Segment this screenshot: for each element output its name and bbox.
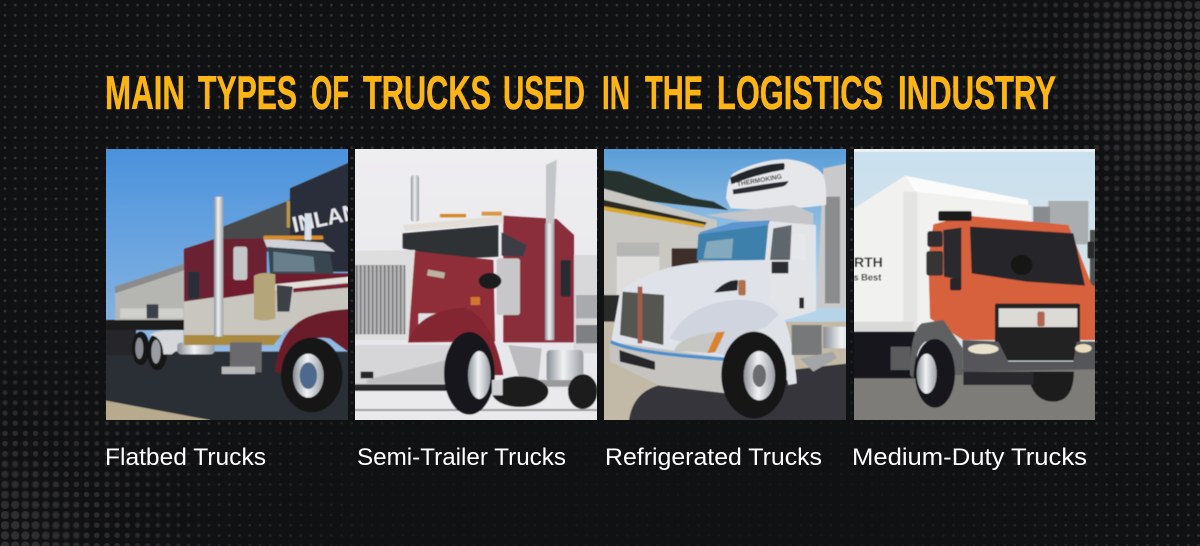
label: medium-duty trucks: Medium-Duty Trucks [852, 444, 1087, 471]
cab [926, 211, 1110, 340]
title: USED [503, 66, 585, 119]
front wheel [721, 332, 787, 418]
photo: flatbed truck [106, 149, 348, 420]
title: INDUSTRY [898, 66, 1056, 119]
photo: semi-trailer truck [355, 149, 597, 420]
hood [408, 251, 495, 342]
fender [408, 308, 503, 375]
wheels [915, 339, 1074, 408]
trees [593, 169, 728, 210]
title: OF [311, 66, 349, 119]
trailer [573, 255, 610, 353]
title: TRUCKS [363, 66, 491, 119]
sleeper [503, 216, 574, 342]
front wheel [444, 332, 503, 415]
air cleaner [479, 258, 520, 315]
bumper [347, 345, 459, 384]
box body [843, 176, 1032, 332]
box body: s Best [853, 272, 881, 282]
cargo box [816, 163, 846, 309]
hood [610, 260, 797, 382]
title: LOGISTICS [717, 66, 883, 119]
label: semi-trailer trucks: Semi-Trailer Trucks [357, 444, 566, 471]
label: flatbed trucks: Flatbed Trucks [105, 444, 266, 471]
rear wheels [132, 332, 167, 370]
title: TYPES [198, 66, 297, 119]
fender and front wheel [274, 308, 348, 412]
building: dark warehouse [289, 162, 348, 272]
bumper and headlights [963, 340, 1110, 372]
headlight [674, 332, 725, 353]
box body: RTH [854, 254, 883, 270]
grille [620, 287, 664, 345]
bumper [609, 342, 733, 393]
air cleaner [254, 273, 275, 321]
windshield [403, 225, 498, 259]
title: THE [645, 66, 703, 119]
sleeper and cab [184, 236, 367, 345]
title: MAIN [105, 66, 185, 119]
rear wheels [492, 374, 597, 409]
label: refrigerated trucks: Refrigerated Trucks [605, 444, 822, 471]
cab [697, 220, 816, 322]
fender [757, 328, 798, 386]
exhaust stack [214, 197, 223, 337]
exhaust stacks [411, 160, 557, 340]
reefer unit [726, 159, 826, 209]
fender [910, 320, 963, 378]
loading dock building [604, 188, 718, 296]
grille [347, 250, 415, 340]
background buildings [1032, 200, 1095, 287]
cab roof [403, 216, 503, 231]
photo: medium-duty truck [854, 149, 1095, 420]
reefer unit: THERMOKING [736, 174, 782, 188]
tank and step [502, 345, 588, 387]
photo: refrigerated truck [604, 149, 846, 420]
title: IN [602, 66, 630, 119]
chassis [854, 331, 918, 379]
front grille [995, 304, 1080, 360]
chassis and step [791, 324, 846, 372]
building: dark warehouse: INLAN [290, 199, 361, 237]
